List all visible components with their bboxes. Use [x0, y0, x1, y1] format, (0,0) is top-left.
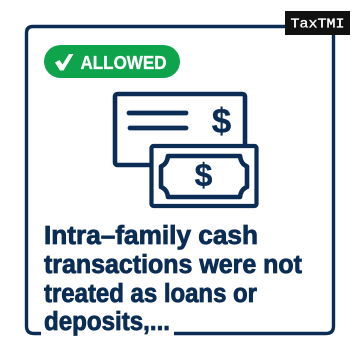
icon: check mark: [55, 54, 74, 70]
badge: allowed: ALLOWED: [80, 53, 167, 73]
icon: cheque: $: [212, 102, 231, 141]
icon: banknote: [152, 146, 256, 206]
card frame: [26, 26, 334, 334]
watermark: TaxTMI: TaxTMI: [290, 18, 344, 32]
heading text: deposits,...: [44, 308, 170, 336]
icon: banknote: $: [195, 157, 213, 193]
watermark: TaxTMI: [285, 11, 350, 35]
badge: allowed: [44, 45, 180, 78]
heading text: [44, 222, 302, 336]
heading text: Intra–family cash: [44, 222, 258, 250]
icon: cheque and banknote: [115, 94, 256, 206]
heading text: treated as loans or: [44, 280, 257, 308]
heading text: transactions were not: [44, 251, 302, 279]
icon: cheque: [115, 94, 245, 165]
